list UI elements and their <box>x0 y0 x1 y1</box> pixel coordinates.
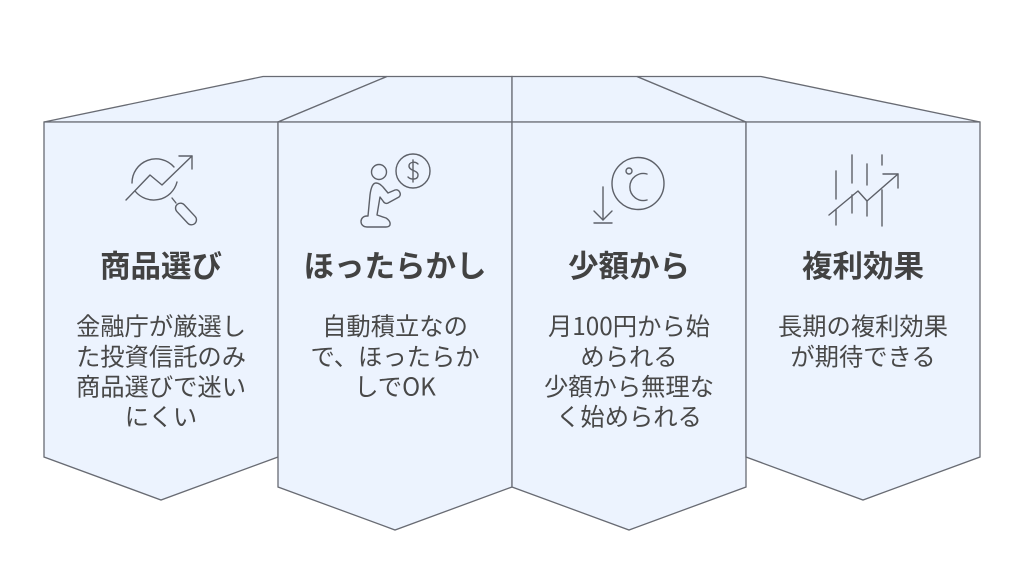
heading: 少額から <box>568 242 690 286</box>
body text: 商品選びで迷い <box>76 368 246 402</box>
body text: められる <box>580 338 678 372</box>
body text: にくい <box>125 398 197 432</box>
panel: 商品選び <box>44 122 278 500</box>
body text: 金融庁が厳選し <box>76 307 246 342</box>
body text <box>310 307 480 402</box>
body text <box>544 307 714 432</box>
panel: 複利効果 <box>746 122 980 500</box>
body text: た投資信託のみ <box>76 338 246 372</box>
heading: 複利効果 <box>802 242 924 286</box>
body text: 自動積立なの <box>322 307 468 342</box>
heading: ほったらかし <box>304 242 486 286</box>
body text: 月100円から始 <box>548 307 710 342</box>
panel: ほったらかし <box>278 122 512 530</box>
icon: magnifier with rising chart <box>126 156 199 227</box>
heading: 商品選び <box>100 242 222 286</box>
panel: 少額から <box>512 122 746 530</box>
body text: く始められる <box>556 398 702 432</box>
body text: 長期の複利効果 <box>778 307 948 342</box>
body text: 少額から無理な <box>544 368 714 402</box>
body text: が期待できる <box>790 338 936 372</box>
icon: coin and down arrow <box>594 158 664 223</box>
body text: しでOK <box>354 368 436 402</box>
top roof: panel backgrounds <box>44 76 980 122</box>
body text <box>76 307 246 432</box>
body text <box>778 307 948 372</box>
body text: で、ほったらか <box>310 338 480 372</box>
icon: kneeling person with coin <box>361 154 430 227</box>
icon: rising line chart with vertical bars <box>829 155 898 226</box>
